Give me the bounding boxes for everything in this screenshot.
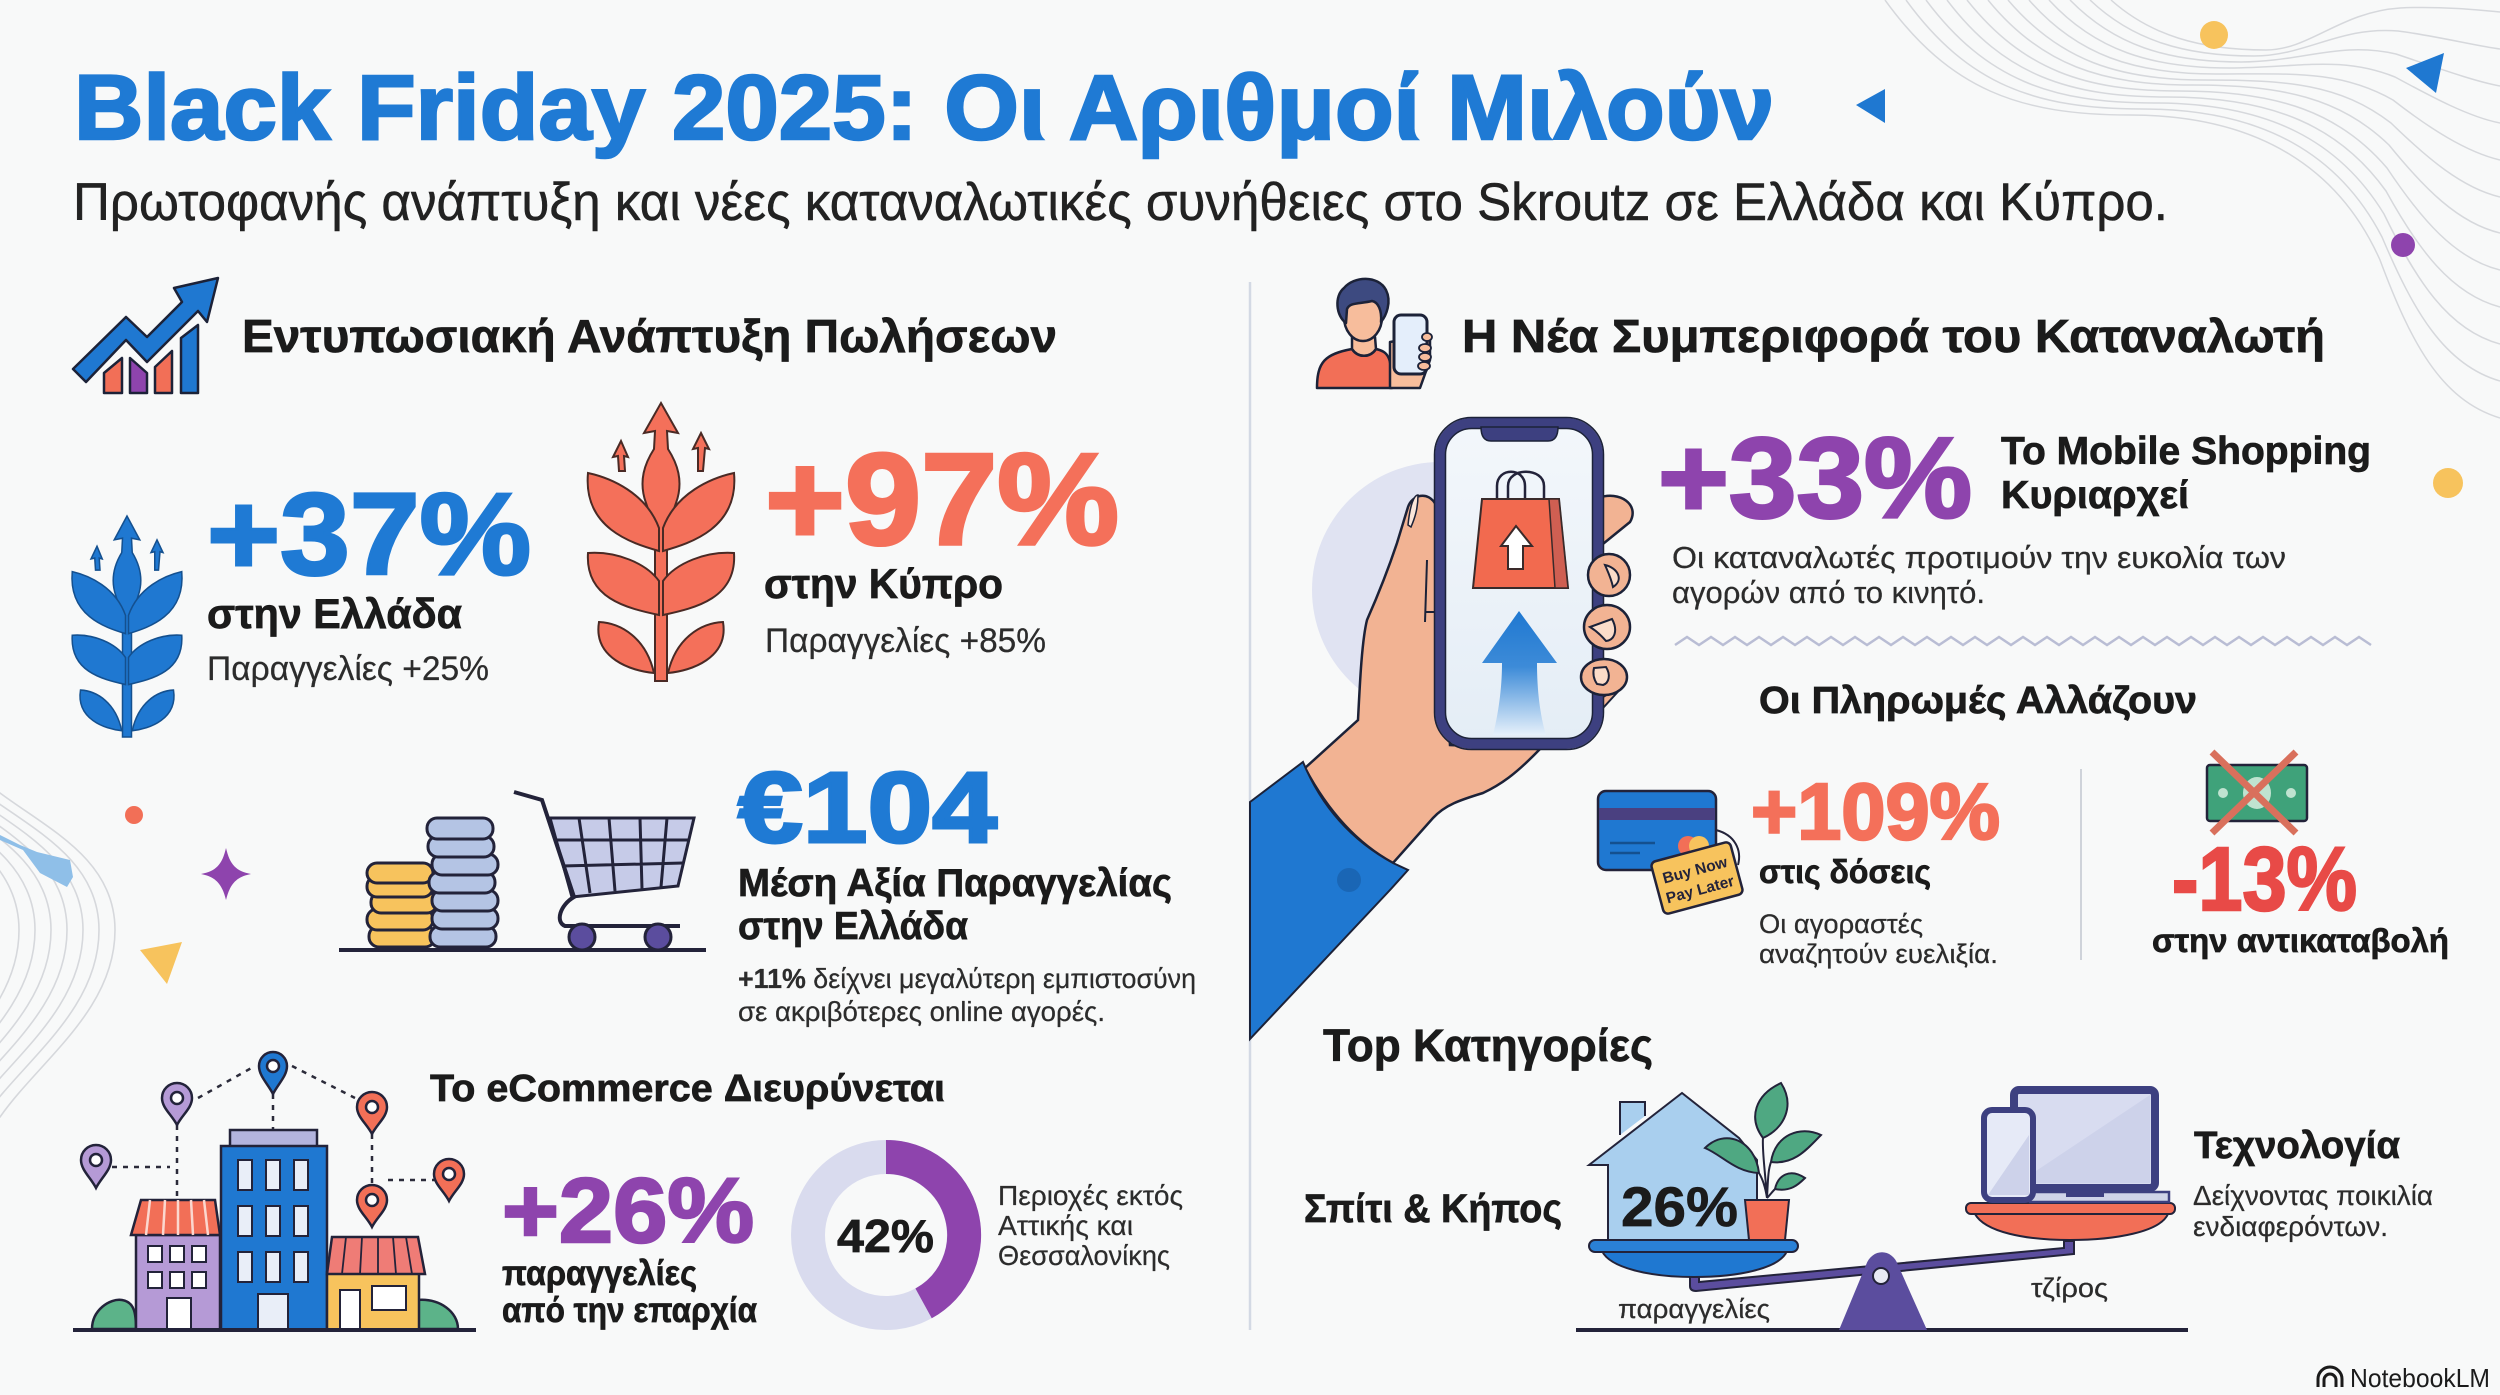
stat: +97% Cyprus: στην Κύπρο <box>764 560 1003 607</box>
stat: +37% Greece: στην Ελλάδα <box>207 590 462 637</box>
illustration: balance scale: 26% <box>1621 1175 1738 1238</box>
stat: +37% Greece: Παραγγελίες +25% <box>207 650 489 688</box>
label: home and garden: Σπίτι & Κήπος <box>1304 1187 1562 1231</box>
donut chart: 42%: 42% <box>837 1210 934 1262</box>
heading: new consumer behaviour: Η Νέα Συμπεριφορά του Καταναλωτή <box>1462 310 2325 362</box>
stat: €104: Μέση Αξία Παραγγελίας <box>738 862 1172 905</box>
donut caption: Αττικής και <box>998 1210 1133 1241</box>
stat: +109% installments: +109% <box>1751 767 2000 856</box>
stat: €104: σε ακριβότερες online αγορές. <box>738 996 1105 1027</box>
heading: eCommerce expands: Το eCommerce Διευρύνεται <box>430 1068 945 1110</box>
panel: consumer behaviour <box>1250 279 2449 1330</box>
stat: +37% Greece: +37% <box>207 469 531 599</box>
stat: +26%: παραγγελίες <box>502 1254 697 1293</box>
icon: orange plant <box>588 403 734 681</box>
icon: coins and cart <box>339 792 706 950</box>
stat: +37% Greece <box>207 469 531 688</box>
icon: crossed out cash <box>2207 752 2307 833</box>
stat: -13% cash on delivery: στην αντικαταβολή <box>2152 922 2449 959</box>
stat: +33% mobile shopping: Το Mobile Shopping <box>2001 430 2371 473</box>
heading: sales growth: Εντυπωσιακή Ανάπτυξη Πωλήσεων <box>242 310 1057 362</box>
stat: +33% mobile shopping <box>1658 415 2371 610</box>
heading: top categories: Top Κατηγορίες <box>1323 1020 1653 1071</box>
donut caption <box>998 1180 1183 1271</box>
stat: +109% installments: Οι αγοραστές <box>1759 909 1923 939</box>
stat: €104 <box>738 752 1196 1027</box>
subtitle: Πρωτοφανής ανάπτυξη και νέες καταναλωτικές συνήθειες στο Skroutz σε Ελλάδα και Κύπρο. <box>73 173 2168 232</box>
donut caption: Θεσσαλονίκης <box>998 1240 1170 1271</box>
donut caption: Περιοχές εκτός <box>998 1180 1183 1211</box>
stat: +26% <box>502 1160 757 1330</box>
icon: card and buy now pay later tag: Pay Later <box>1664 873 1736 907</box>
icon: blue plant <box>72 516 182 737</box>
panel: sales growth <box>72 278 1196 1330</box>
icon: growth chart <box>73 278 218 393</box>
stat: €104: €104 <box>738 752 997 864</box>
category: technology: ενδιαφερόντων. <box>2193 1211 2388 1242</box>
stat: +26%: από την επαρχία <box>502 1291 757 1330</box>
illustration: balance scale: παραγγελίες <box>1618 1294 1770 1324</box>
stat: +26%: +26% <box>502 1160 754 1262</box>
icon: card and buy now pay later tag <box>1598 791 1744 915</box>
decorative wave lines left <box>0 725 115 1220</box>
donut chart: 42% <box>808 1157 964 1313</box>
stat: -13% cash on delivery: -13% <box>2172 830 2357 930</box>
stat: +33% mobile shopping: αγορών από το κινητό. <box>1672 575 1985 610</box>
category: technology: Τεχνολογία <box>2194 1125 2400 1167</box>
illustration: balance scale: τζίρος <box>2031 1273 2108 1303</box>
illustration: balance scale <box>1576 1083 2188 1330</box>
stat: €104: +11% δείχνει μεγαλύτερη εμπιστοσύνη <box>738 963 1196 994</box>
stat: +109% installments <box>1751 767 2000 969</box>
stat: €104: στην Ελλάδα <box>738 905 968 948</box>
stat: +33% mobile shopping: Κυριαρχεί <box>2001 474 2189 517</box>
category: technology: Δείχνοντας ποικιλία <box>2193 1180 2433 1211</box>
icon: person with phone <box>1317 279 1432 388</box>
stat: +97% Cyprus: Παραγγελίες +85% <box>765 622 1046 660</box>
NotebookLM logo: NotebookLM <box>2350 1363 2490 1393</box>
decorative shapes <box>125 21 2463 984</box>
icon: card and buy now pay later tag: Buy Now <box>1661 854 1730 888</box>
decorative wave lines top right <box>1885 0 2500 418</box>
stat: +109% installments: στις δόσεις <box>1759 853 1931 890</box>
column divider <box>1249 282 1251 1330</box>
stat: -13% cash on delivery <box>2152 830 2449 959</box>
stat: +33% mobile shopping: +33% <box>1658 415 1972 542</box>
stat: +97% Cyprus <box>764 426 1119 660</box>
category: technology <box>2193 1125 2433 1242</box>
illustration: hand holding phone <box>1250 418 1633 1039</box>
stat: +109% installments: αναζητούν ευελιξία. <box>1759 939 1998 969</box>
heading: payments change: Οι Πληρωμές Αλλάζουν <box>1759 680 2197 722</box>
icon: city with map pins <box>73 1052 476 1330</box>
stat: +33% mobile shopping: Οι καταναλωτές προτιμούν την ευκολία των <box>1672 540 2286 575</box>
title: Black Friday 2025: Οι Αριθμοί Μιλούν <box>74 57 1774 159</box>
stat: +97% Cyprus: +97% <box>765 426 1119 572</box>
